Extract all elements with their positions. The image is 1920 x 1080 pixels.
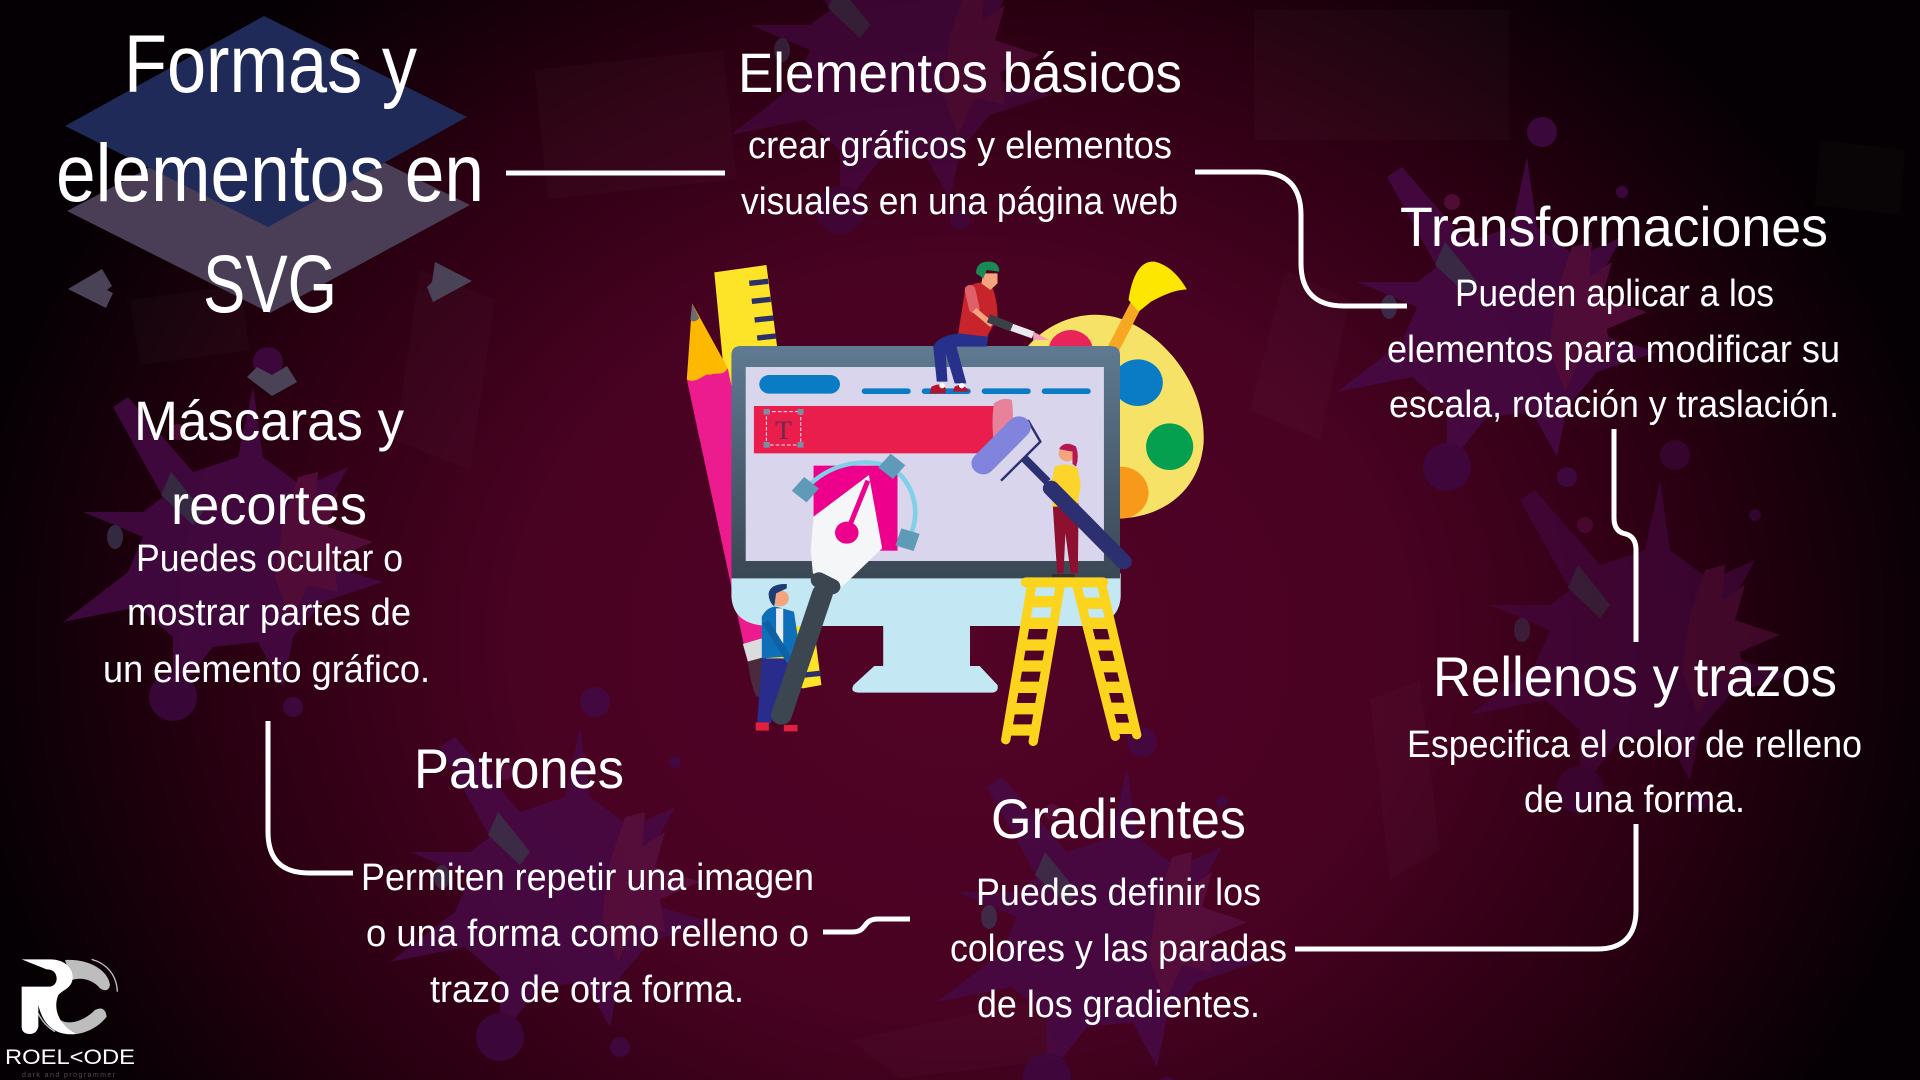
block: Máscaras y recortes: recortes	[171, 473, 367, 536]
block: Patrones: trazo de otra forma.	[430, 969, 744, 1011]
connector: title to basics	[506, 170, 725, 176]
title: Formas y	[124, 19, 417, 110]
block: Gradientes: de los gradientes.	[977, 984, 1260, 1026]
icon: paint palette	[1026, 262, 1204, 519]
icon: ruler	[714, 265, 821, 688]
block: Transformaciones	[1387, 195, 1840, 426]
logo wordmark: ROEL<ODE	[5, 1046, 135, 1069]
block: Rellenos y trazos: de una forma.	[1524, 779, 1745, 821]
red banner with text box	[754, 399, 1013, 453]
connector: transformations to fills	[1614, 429, 1636, 642]
block: Rellenos y trazos: Especifica el color de relleno	[1407, 724, 1862, 766]
title	[56, 19, 484, 330]
block: Transformaciones: escala, rotación y traslación.	[1389, 384, 1839, 426]
block: Elementos básicos: Elementos básicos	[738, 41, 1182, 104]
block: Elementos básicos	[738, 41, 1182, 223]
red banner with text box: T	[775, 416, 792, 445]
icon: ladder	[1006, 582, 1139, 742]
block: Elementos básicos: visuales en una página web	[741, 181, 1178, 223]
block: Máscaras y recortes: un elemento gráfico.	[103, 649, 430, 691]
title: elementos en	[56, 128, 484, 219]
block: Elementos básicos: crear gráficos y elementos	[748, 125, 1172, 167]
icon: pencil	[687, 303, 781, 697]
figure: woman with roller	[1051, 444, 1081, 578]
logo tagline: dark and programmer	[22, 1072, 116, 1079]
connector: patterns to masks	[268, 721, 353, 873]
block: Patrones: Patrones	[414, 737, 624, 800]
block: Máscaras y recortes: Máscaras y	[134, 389, 404, 452]
block: Máscaras y recortes: Puedes ocultar o	[136, 538, 403, 580]
block: Gradientes	[950, 787, 1287, 1026]
block: Patrones: Permiten repetir una imagen	[361, 857, 814, 899]
title diamonds	[65, 16, 472, 396]
connector: fills to gradients	[1295, 824, 1636, 949]
block: Transformaciones: Pueden aplicar a los	[1455, 273, 1774, 315]
logo mark	[22, 959, 117, 1034]
figure: man holding pen	[756, 584, 797, 731]
block: Transformaciones: elementos para modificar su	[1387, 329, 1840, 371]
icon: monitor	[731, 346, 1121, 693]
connector: gradients to patterns	[823, 919, 910, 932]
block: Gradientes: Gradientes	[991, 787, 1246, 850]
illustration: monitor and designers	[687, 262, 1204, 742]
connector: basics to transformations	[1195, 172, 1407, 306]
figure: man sitting on monitor	[930, 262, 1049, 393]
block: Patrones: o una forma como relleno o	[366, 913, 809, 955]
icon: pen tool curve	[781, 454, 920, 715]
block: Rellenos y trazos	[1407, 645, 1862, 821]
block: Patrones	[361, 737, 814, 1011]
block: Transformaciones: Transformaciones	[1400, 195, 1828, 258]
block: Máscaras y recortes	[103, 389, 430, 691]
block: Rellenos y trazos: Rellenos y trazos	[1433, 645, 1837, 708]
block: Máscaras y recortes: mostrar partes de	[127, 592, 411, 634]
title: SVG	[203, 239, 337, 330]
logo: RoelCode	[5, 959, 135, 1079]
icon: paint roller	[983, 420, 1124, 562]
block: Gradientes: Puedes definir los	[976, 872, 1261, 914]
block: Gradientes: colores y las paradas	[950, 928, 1287, 970]
